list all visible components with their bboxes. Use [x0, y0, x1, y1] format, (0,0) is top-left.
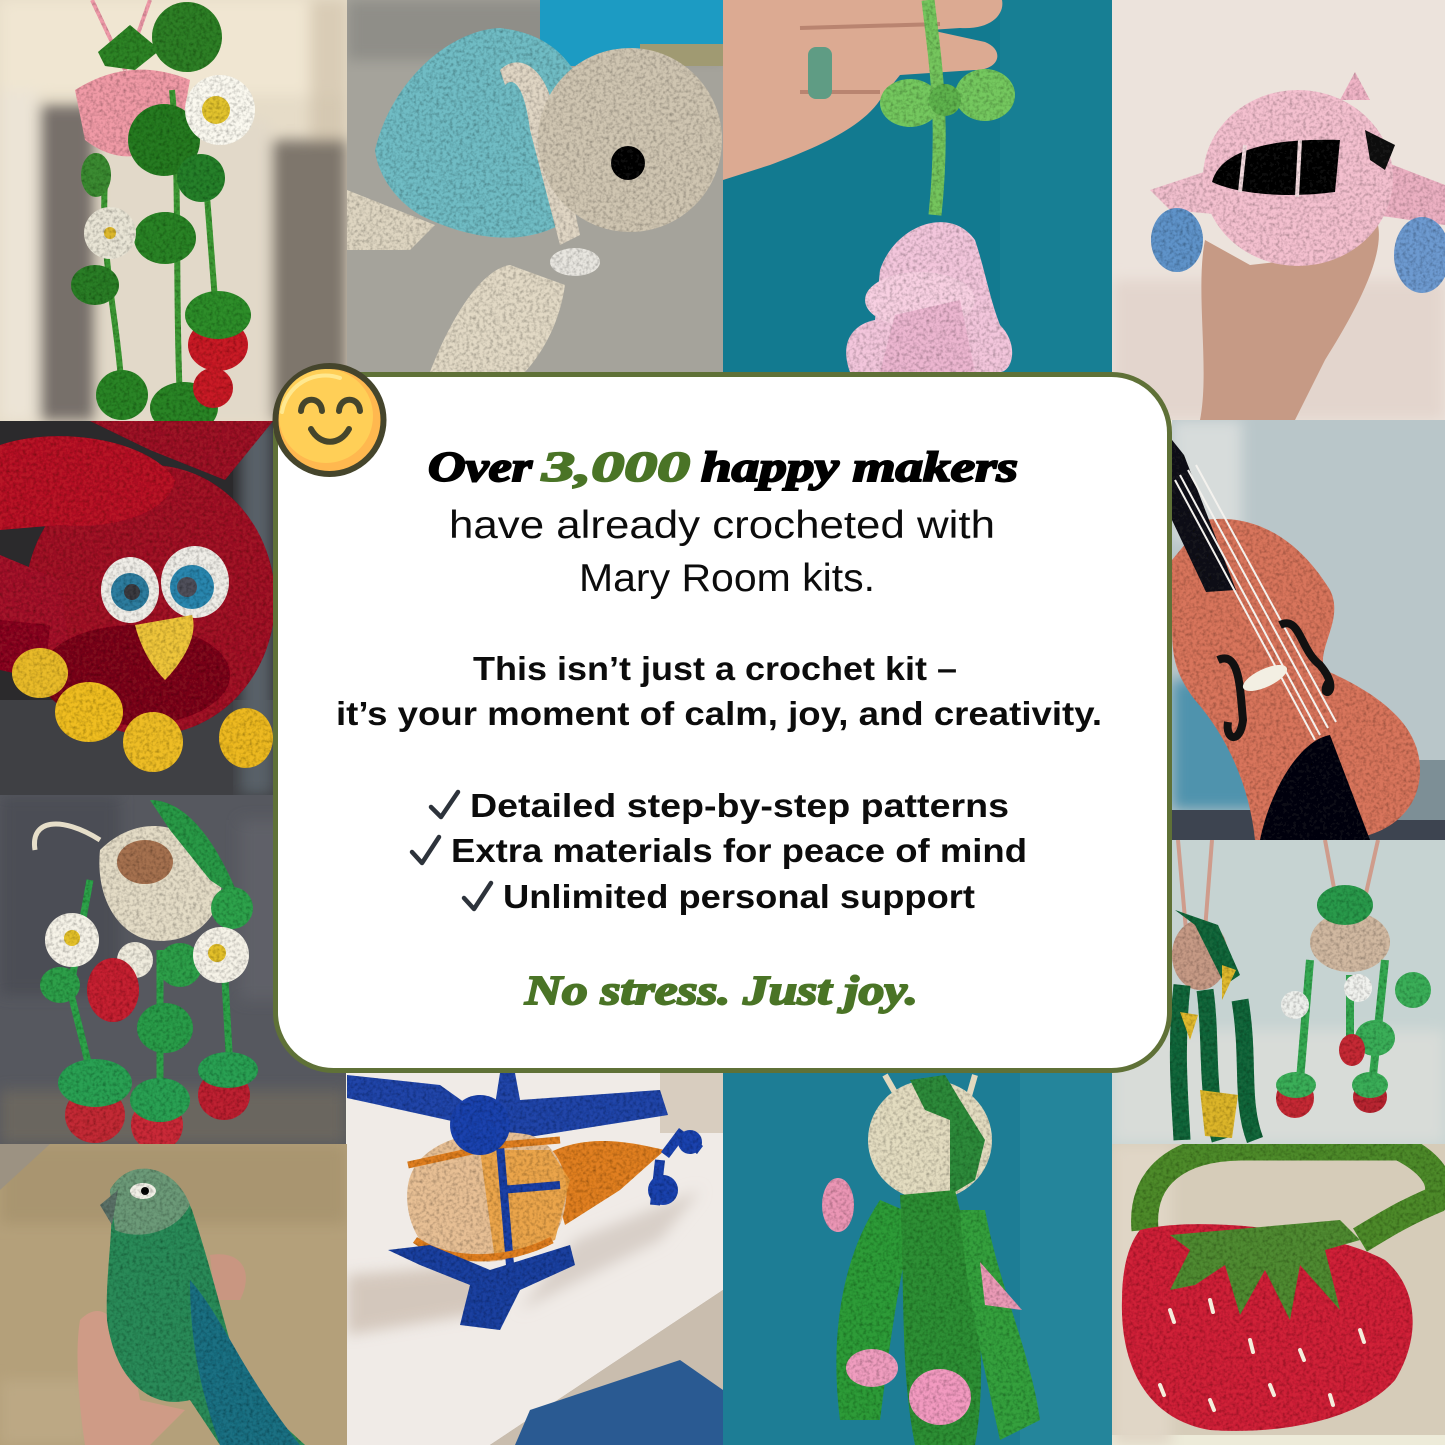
check item: support: Unlimited personal support	[503, 878, 975, 915]
photo: hand holding pink bell flower	[723, 0, 1112, 372]
text: intro lines	[449, 504, 995, 600]
text: not just a crochet kit: it’s your moment of calm, joy, and creativity.	[336, 695, 1102, 732]
text: intro lines: Mary Room kits.	[579, 557, 875, 600]
photo: hanging vine planter with pink flowers	[723, 1073, 1112, 1445]
heading: over 3,000 happy makers: Over	[428, 445, 533, 491]
photo: strawberry plant on grey blanket	[0, 795, 346, 1151]
photo: red crochet bird	[0, 421, 275, 795]
panel: message card	[276, 374, 1170, 1070]
photo: red strawberry crochet bag	[1112, 1144, 1445, 1445]
photo: pink crochet airplane in hand	[1112, 0, 1445, 420]
heading: over 3,000 happy makers: 3,000	[540, 445, 690, 491]
text: intro lines: have already crocheted with	[449, 504, 995, 547]
photo: crochet helicopter on white table	[347, 1073, 723, 1445]
text: not just a crochet kit: This isn’t just a crochet kit –	[473, 650, 957, 687]
photo: crochet violin	[1172, 420, 1445, 840]
check item: patterns: Detailed step-by-step patterns	[470, 787, 1009, 824]
photo: hanging planters on pale wall	[1112, 840, 1445, 1144]
check item: materials: Extra materials for peace of mind	[451, 832, 1027, 869]
heading: over 3,000 happy makers: happy makers	[701, 445, 1018, 491]
heading: over 3,000 happy makers	[428, 445, 1018, 491]
closing line: No stress. Just joy.	[524, 967, 918, 1013]
text: not just a crochet kit	[336, 650, 1102, 732]
photo: hanging strawberry plant with pink pot	[0, 0, 347, 434]
checklist	[412, 787, 1027, 915]
photo: crochet turtle on sofa	[347, 0, 723, 372]
icon: smiling emoji	[276, 366, 384, 474]
photo: green crochet parrot in hand	[0, 1144, 347, 1445]
